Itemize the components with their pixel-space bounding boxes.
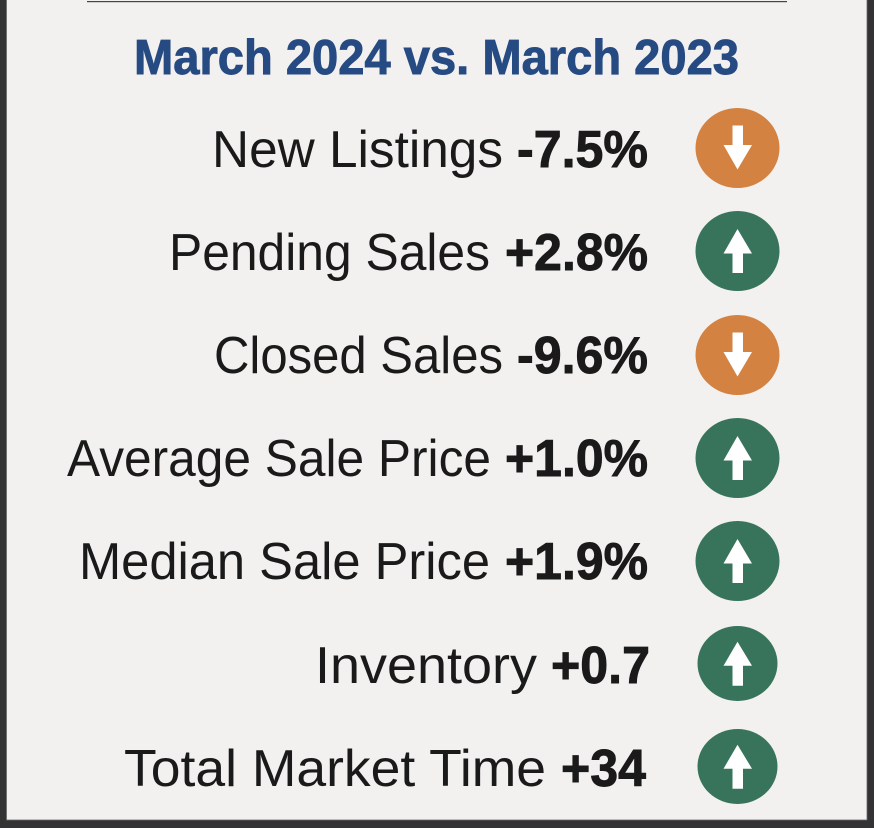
icon: green up arrow: [696, 418, 780, 498]
row: closed sales: -9.6%: [517, 327, 648, 385]
top rule: [87, 1, 787, 2]
title: March 2024 vs. March 2023: [134, 31, 739, 85]
icon: green up arrow: [698, 626, 778, 701]
row: pending sales: [169, 211, 780, 291]
row: median sale price: +1.9%: [505, 533, 648, 591]
row: inventory: [315, 626, 778, 701]
row: total market time: [124, 729, 778, 804]
icon: orange down arrow: [696, 315, 780, 395]
row: new listings: New Listings: [212, 121, 503, 179]
row: average sale price: [67, 418, 780, 498]
icon: green up arrow: [696, 211, 780, 291]
row: inventory: Inventory: [315, 637, 537, 695]
row: total market time: Total Market Time: [124, 740, 546, 798]
row: closed sales: [214, 315, 780, 395]
row: total market time: +34: [561, 740, 646, 798]
row: pending sales: Pending Sales: [169, 224, 490, 282]
row: new listings: -7.5%: [517, 121, 648, 179]
row: median sale price: Median Sale Price: [79, 533, 490, 591]
row: new listings: [212, 108, 780, 188]
row: average sale price: Average Sale Price: [67, 430, 491, 488]
icon: green up arrow: [696, 521, 780, 601]
icon: orange down arrow: [696, 108, 780, 188]
row: median sale price: [79, 521, 780, 601]
row: closed sales: Closed Sales: [214, 327, 503, 385]
row: average sale price: +1.0%: [505, 430, 648, 488]
icon: green up arrow: [698, 729, 778, 804]
row: pending sales: +2.8%: [505, 224, 648, 282]
row: inventory: +0.7: [551, 637, 650, 695]
